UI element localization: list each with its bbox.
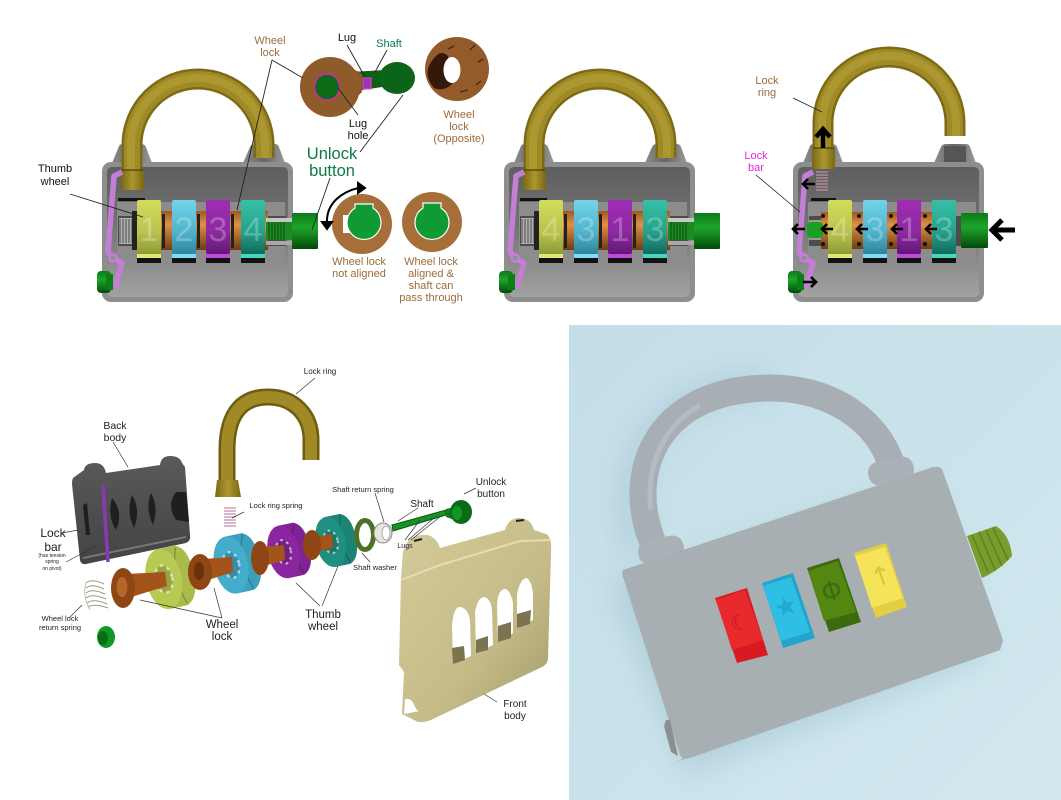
leader lines [70, 45, 403, 230]
label: unlock button: button [477, 489, 505, 500]
wheel symbols [727, 559, 897, 639]
wheel lock opposite [425, 37, 489, 101]
gear mechanism [807, 212, 956, 249]
back body [72, 456, 190, 564]
label: thumb wheel: Thumb [38, 163, 72, 175]
label: wheel lock not aligned: not aligned [332, 268, 386, 280]
label: lock ring: Lock ring [304, 367, 336, 376]
shaft and unlock button [392, 500, 472, 531]
thumb wheel yellow [140, 543, 200, 613]
arrow: rotation [322, 183, 365, 229]
label: shaft return spring: Shaft return spring [332, 485, 394, 494]
label: back body: Back [103, 420, 127, 432]
lock ring [215, 397, 311, 497]
red wheel [715, 588, 768, 663]
panel: exploded view [62, 378, 551, 722]
right socket [944, 146, 966, 162]
label: thumb wheel: wheel [307, 621, 338, 633]
shackle collar [520, 170, 547, 201]
soft shadow [610, 385, 990, 775]
diagram: wheel lock aligned [402, 192, 462, 252]
wheel symbols: ↑ [867, 559, 897, 595]
thumb wheel blue [208, 531, 266, 597]
unlock button [292, 213, 318, 249]
thumb wheels [137, 200, 265, 263]
shaft return spring [374, 523, 392, 543]
internal mechanism [119, 211, 293, 250]
shackle collar [118, 170, 145, 201]
label: lug hole: hole [348, 130, 368, 142]
lock bar [510, 172, 524, 288]
pivot stub [788, 271, 804, 293]
label: tension spring note: spring [45, 559, 59, 565]
pivot stub [499, 271, 515, 293]
label: unlock button: Unlock [476, 477, 507, 488]
label: lock ring: Lock [755, 75, 779, 87]
wheel digits: 4 [542, 211, 560, 249]
panel: lock 1 numbered wheels [97, 78, 318, 302]
label: tension spring note: (has tension [38, 553, 66, 559]
wheel digits: 4 [831, 211, 849, 249]
lock bar [799, 172, 813, 288]
panel: photo of toy lock [569, 325, 1061, 800]
label: wheel lock: lock [260, 47, 280, 59]
lock body [793, 144, 984, 302]
label: wheel lock aligned: Wheel lock [404, 256, 458, 268]
shackle [131, 78, 265, 190]
pivot stub [97, 271, 113, 293]
shackle collars [636, 454, 916, 567]
label: wheel lock opposite: (Opposite) [433, 133, 485, 145]
label: shaft: Shaft [410, 499, 434, 510]
label: unlock button: Unlock [307, 145, 358, 163]
label: lock bar: bar [748, 162, 764, 174]
shackle [643, 388, 893, 545]
raised shackle collar [811, 148, 836, 201]
wheel digits: 1 [140, 211, 158, 249]
label: lug: Lug [338, 32, 356, 44]
unlock button [694, 213, 720, 249]
wheel digits: 3 [209, 211, 227, 249]
raised shackle [822, 56, 956, 168]
label: wheel lock return spring: Wheel lock [42, 614, 79, 623]
label: thumb wheel: Thumb [305, 609, 341, 621]
wheel digits: 3 [935, 211, 953, 249]
label: wheel lock: lock [212, 631, 232, 643]
front body [399, 518, 551, 722]
green wheel [807, 558, 861, 632]
label: wheel lock not aligned: Wheel lock [332, 256, 386, 268]
copper tubes and flanges [111, 530, 333, 608]
yellow wheel [854, 543, 907, 618]
motion arrows [793, 129, 1015, 287]
shaft washer [356, 520, 374, 550]
lock bar [108, 172, 122, 288]
lock ring spring [816, 172, 828, 190]
wheel lock disc [300, 57, 362, 117]
wheel lock return spring [85, 581, 108, 610]
label: lock ring spring: Lock ring spring [250, 501, 302, 510]
pushed unlock button [961, 213, 988, 248]
label: front body: body [504, 711, 526, 722]
label: lugs: Lugs [397, 543, 413, 550]
wheel symbols: Φ [818, 575, 846, 609]
label: shaft washer: Shaft washer [353, 563, 397, 572]
panel: lock 2 aligned wheels [499, 78, 720, 302]
label: wheel lock: Wheel [254, 35, 286, 47]
label: wheel lock aligned: pass through [399, 292, 463, 304]
shaft and button [350, 62, 415, 94]
lock ring spring [224, 508, 236, 526]
button [967, 526, 1012, 578]
label: lug hole: Lug [349, 118, 367, 130]
wheel digits [831, 211, 953, 249]
stub [97, 626, 115, 648]
thumb wheel teal [311, 512, 361, 570]
thumb wheels [828, 200, 956, 263]
label: shaft: Shaft [376, 38, 402, 50]
wheel digits: 2 [175, 211, 193, 249]
label: lock bar: Lock [40, 526, 67, 540]
label: thumb wheel: wheel [40, 176, 69, 188]
label: lock ring: ring [758, 87, 776, 99]
thumb wheel purple [263, 520, 315, 581]
wheel digits: 3 [646, 211, 664, 249]
wheel digits: 1 [611, 211, 629, 249]
label: lock bar: bar [44, 540, 62, 554]
diagram: wheel lock not aligned [332, 194, 392, 254]
label: wheel lock opposite: Wheel [443, 109, 475, 121]
internal mechanism [521, 211, 695, 250]
wheel digits [140, 211, 262, 249]
blue wheel [762, 573, 815, 648]
lock body [504, 144, 695, 302]
label: wheel lock return spring: return spring [39, 623, 81, 632]
lock body [102, 144, 293, 302]
leader lines: lock 3 [756, 98, 822, 212]
wheel digits [542, 211, 664, 249]
wheel digits: 3 [866, 211, 884, 249]
label: back body: body [104, 432, 127, 444]
label: tension spring note: on pivot) [42, 566, 62, 572]
label: front body: Front [503, 699, 527, 710]
label: wheel lock opposite: lock [449, 121, 469, 133]
label: wheel lock: Wheel [206, 619, 238, 631]
label: wheel lock aligned: aligned & [408, 268, 455, 280]
leader lines: exploded view [62, 378, 497, 702]
callout: wheel lock exploded detail [70, 37, 489, 230]
panel: lock 3 opened [788, 56, 1015, 302]
label: unlock button: button [309, 162, 355, 180]
lug [363, 78, 371, 89]
lock body [622, 467, 1003, 762]
thumb wheels [539, 200, 667, 263]
wheel symbols: ☾ [727, 609, 754, 639]
wheel digits: 4 [244, 211, 262, 249]
wheel digits: 3 [577, 211, 595, 249]
label: wheel lock aligned: shaft can [409, 280, 453, 292]
wheel symbols: ★ [770, 589, 802, 625]
photo background [569, 325, 1061, 800]
shackle [533, 78, 667, 190]
wheel digits: 1 [900, 211, 918, 249]
label: lock bar: Lock [744, 150, 768, 162]
